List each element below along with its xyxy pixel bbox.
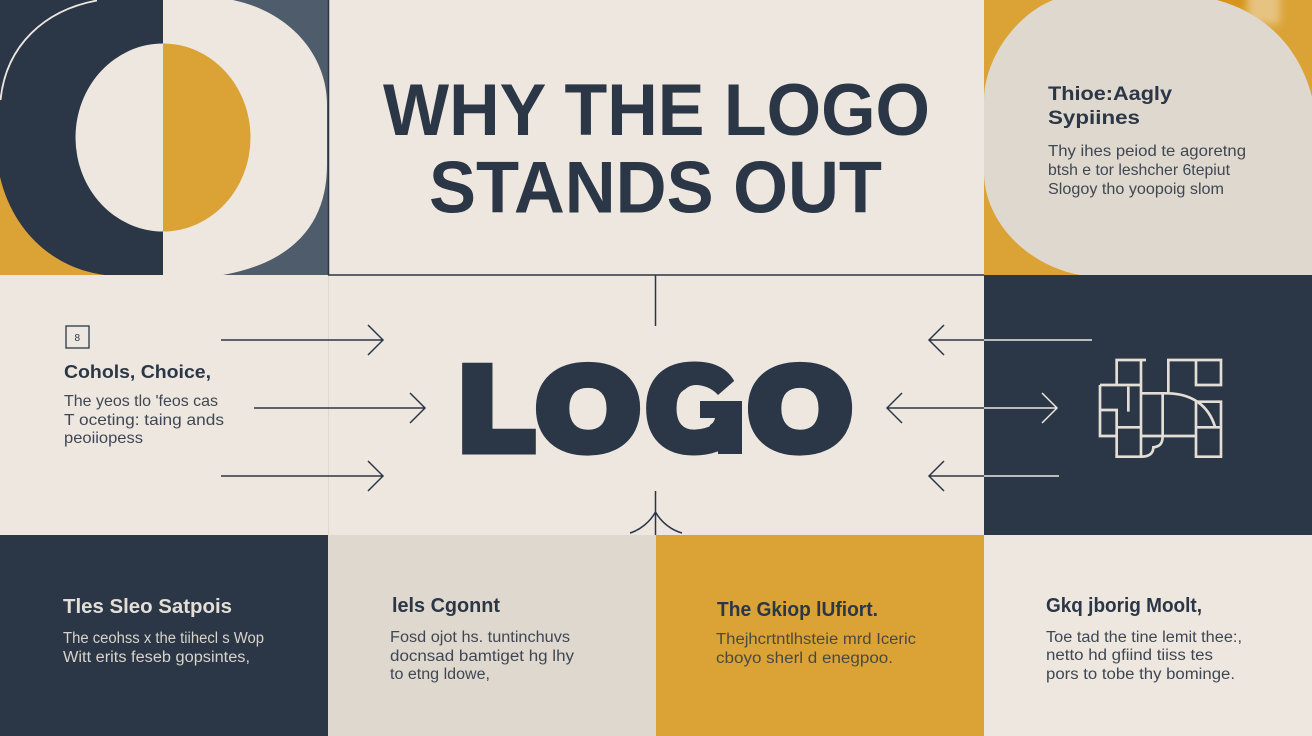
panel: bottom card 4: netto hd gfiind tiiss tes — [1046, 647, 1213, 664]
heading: why the logo stands out — [328, 0, 984, 275]
connector: top vertical line — [654, 275, 656, 326]
arrow: left middle — [254, 393, 425, 423]
text: left callout body: peoiiopess — [64, 430, 143, 447]
panel: bottom card 3: The Gkiop lUfiort. — [717, 599, 878, 621]
arrow: left bottom — [221, 461, 383, 491]
central wordmark: LOGO: O — [750, 345, 850, 472]
text: top right body: Slogoy tho yoopoig slom — [1048, 181, 1224, 198]
panel: bottom card 4 — [984, 535, 1312, 736]
panel: bottom card 3: Thejhcrtntlhsteie mrd Iceric — [716, 631, 916, 648]
panel: bottom card 2: docnsad bamtiget hg lhy — [390, 648, 574, 665]
panel: bottom card 3: cboyo sherl d enegpoo. — [716, 650, 893, 667]
connector: bottom branching line — [630, 491, 682, 535]
panel: bottom card 2: to etng ldowe, — [390, 666, 490, 683]
text: left callout body: T oceting: taing ands — [64, 412, 224, 429]
panel: bottom card 2 — [328, 535, 656, 736]
panel: abstract circle graphic — [0, 0, 328, 275]
central wordmark: LOGO — [461, 345, 850, 473]
central wordmark: LOGO: O — [538, 345, 638, 472]
panel: bottom card 4: pors to tobe thy bominge. — [1046, 666, 1235, 683]
panel: bottom card 1 — [0, 535, 328, 736]
text: top right title — [1048, 83, 1172, 129]
panel: top right callout — [984, 0, 1312, 275]
arrow: left top — [221, 325, 383, 355]
panel: bottom card 1: The ceohss x the tiihecl s Wop — [63, 630, 264, 647]
icon: small numbered box — [66, 326, 89, 348]
text: top right body — [1048, 143, 1246, 198]
panel: bottom card 2: lels Cgonnt — [392, 595, 500, 617]
arrow: right top on cream — [929, 325, 984, 355]
panel: bottom card 1: Witt erits feseb gopsintes, — [63, 649, 250, 666]
panel: bottom card 1: Tles Sleo Satpois — [63, 596, 232, 618]
arrow: right middle double headed — [887, 393, 984, 423]
heading: why the logo stands out: WHY THE LOGO — [383, 70, 930, 151]
panel: bottom card 2: Fosd ojot hs. tuntinchuvs — [390, 629, 570, 646]
arrow: right bottom — [984, 475, 1059, 477]
text: top right body: Thy ihes peiod te agoretng — [1048, 143, 1246, 160]
text: top right title: Thioe:Aagly — [1048, 83, 1172, 105]
arrow: right top on dark panel — [984, 339, 1092, 341]
panel: bottom card 3 — [656, 535, 984, 736]
panel: bottom card 4: Gkq jborig Moolt, — [1046, 595, 1202, 617]
central wordmark: LOGO: L — [461, 345, 533, 473]
arrow: right bottom on cream — [929, 461, 984, 491]
panel: bottom card 4: Toe tad the tine lemit thee:, — [1046, 629, 1242, 646]
text: left callout body: The yeos tlo 'feos cas — [64, 393, 218, 410]
text: left callout body — [64, 393, 224, 447]
heading: why the logo stands out: STANDS OUT — [429, 148, 882, 228]
text: left callout title: Cohols, Choice, — [64, 361, 211, 382]
text: top right body: btsh e tor leshcher 6tepiut — [1048, 162, 1231, 179]
icon: line-art floor plan glyph — [1100, 360, 1221, 457]
central wordmark: LOGO: G — [648, 345, 739, 473]
panel: dark icon panel — [984, 275, 1312, 535]
text: top right title: Sypiines — [1048, 107, 1140, 129]
arrow: right middle on dark panel — [984, 393, 1057, 423]
icon: small numbered box: 8 — [74, 333, 80, 344]
